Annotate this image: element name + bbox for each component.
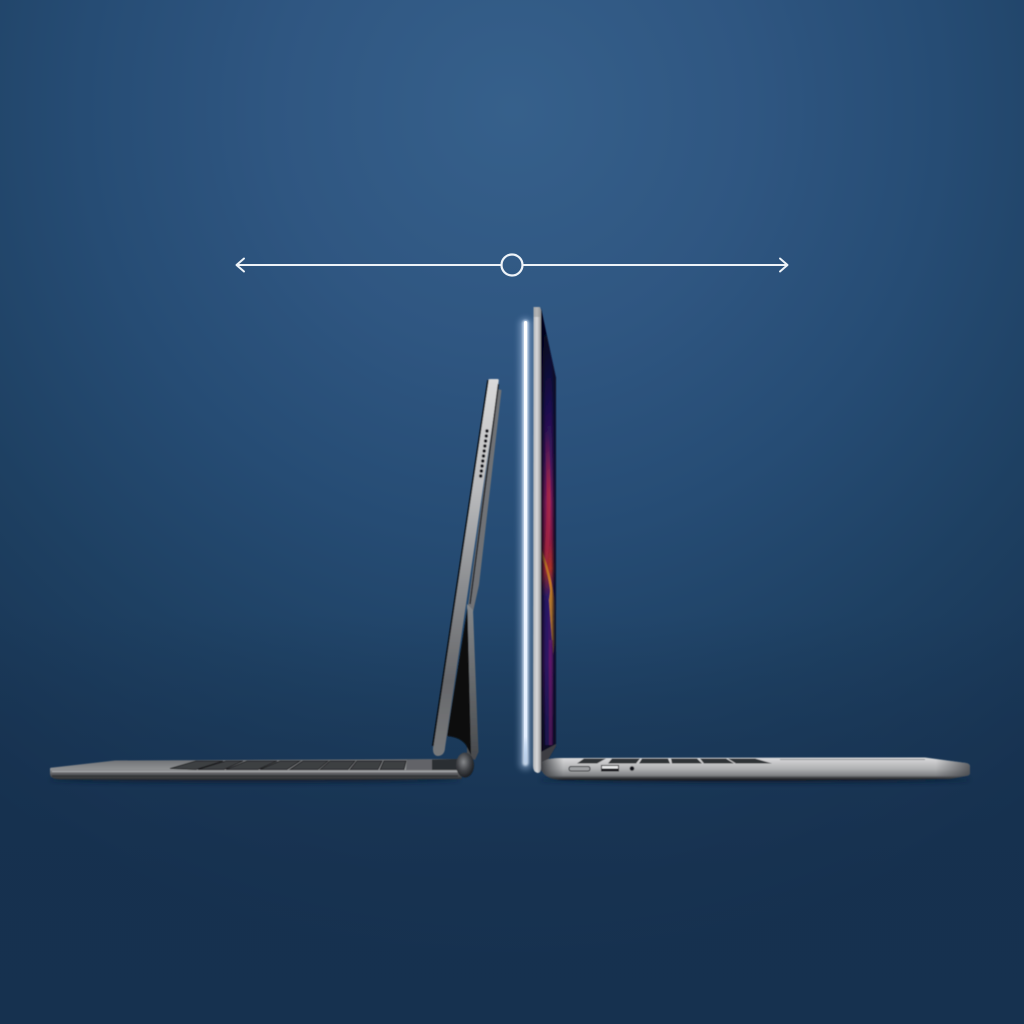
laptop audio jack [630,766,634,771]
light divider: glowing vertical line [519,318,532,770]
tablet body [433,379,499,756]
laptop lid [533,307,541,773]
kickstand [467,604,478,760]
arrow: double-headed comparison slider [236,254,788,276]
tablet rear cover strip [468,389,502,612]
tablet speaker grille [479,429,489,478]
display colour streaks [542,435,551,585]
ground shadow [50,777,970,783]
laptop trackpad edge [780,758,925,760]
laptop base [542,758,970,781]
keyboard keys [170,761,406,770]
laptop lower bezel [541,744,556,772]
tablet screen edge [433,380,488,746]
laptop charging port [569,766,590,771]
keyboard palm rest [406,759,458,770]
laptop keys [577,758,772,764]
device: laptop side view [533,305,970,781]
laptop display [541,305,557,775]
slider handle [502,254,522,276]
hinge [456,752,474,778]
kickstand shadow wedge [447,608,471,755]
laptop USB port [601,765,619,772]
keyboard base [50,759,462,780]
device: tablet on keyboard stand [50,379,502,780]
tablet rear seam [470,384,498,604]
